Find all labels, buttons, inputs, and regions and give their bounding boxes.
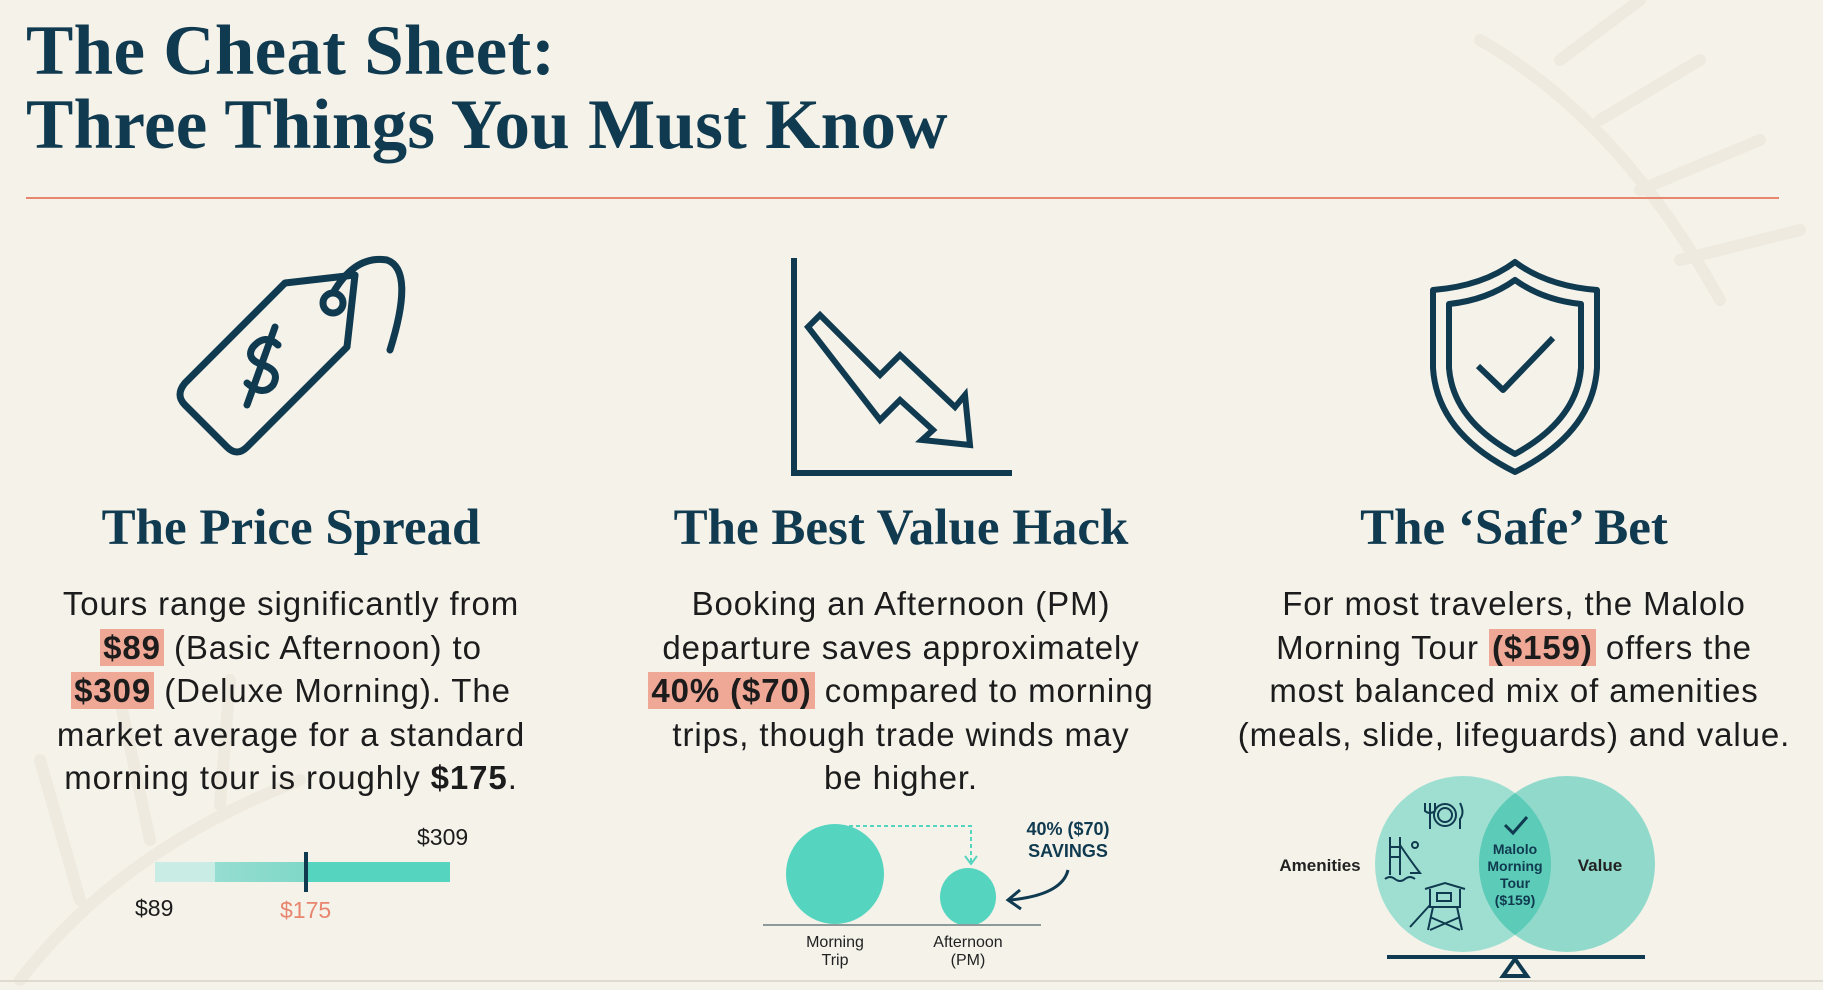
body text: 40% ($70) compared to morning: [651, 672, 1154, 709]
divider line: [26, 197, 1779, 199]
title: [26, 12, 948, 164]
icons: meal, slide, lifeguard tower: [1385, 803, 1465, 930]
body text: $309 (Deluxe Morning). The: [74, 672, 511, 709]
chart: venn diagram: Tour: [1500, 875, 1531, 891]
chart: venn diagram: [1279, 776, 1655, 978]
chart: price range bar: $89: [135, 895, 173, 921]
body text: trips, though trade winds may: [672, 716, 1130, 752]
panel: best value hack: [648, 258, 1154, 796]
chart: savings bubbles: [763, 819, 1110, 969]
arrow: [1010, 870, 1068, 900]
icon: declining chart: [791, 258, 1012, 476]
bottom rule: [0, 980, 1823, 982]
chart: venn diagram: Amenities: [1279, 856, 1361, 875]
body text: departure saves approximately: [662, 628, 1140, 666]
body text: market average for a standard: [57, 716, 525, 752]
chart: savings bubbles: Afternoon: [933, 934, 1003, 951]
heading: The ‘Safe’ Bet: [1360, 500, 1668, 556]
panel: price spread: [57, 256, 525, 796]
title: Three Things You Must Know: [26, 86, 948, 164]
heading: The Best Value Hack: [674, 500, 1128, 556]
chart: venn diagram: ($159): [1495, 892, 1535, 908]
icon: shield: [1430, 258, 1600, 475]
savings label: 40% ($70): [1026, 819, 1110, 839]
balance scale base: [1387, 955, 1645, 959]
body text: (meals, slide, lifeguards) and value.: [1238, 716, 1790, 752]
chart: price range bar: $175: [280, 897, 331, 923]
body text: [648, 585, 1154, 796]
title: The Cheat Sheet:: [26, 12, 555, 90]
chart: savings bubbles: Trip: [822, 952, 849, 969]
chart: price range bar: [135, 824, 468, 923]
icon: price tag: [176, 256, 406, 456]
body text: [57, 585, 525, 796]
body text: [1238, 585, 1790, 753]
body text: morning tour is roughly $175.: [64, 759, 518, 796]
chart: price range bar: $309: [417, 824, 468, 850]
chart: venn diagram: Value: [1578, 856, 1622, 875]
body text: For most travelers, the Malolo: [1282, 585, 1746, 622]
heading: The Price Spread: [102, 500, 480, 556]
chart: savings bubbles: Morning: [806, 934, 864, 951]
chart: savings bubbles: (PM): [951, 952, 985, 969]
panel: safe bet: [1238, 258, 1790, 753]
body text: Morning Tour ($159) offers the: [1276, 628, 1752, 666]
chart: savings bubbles: SAVINGS: [1028, 841, 1108, 861]
body text: Booking an Afternoon (PM): [692, 585, 1110, 622]
body text: most balanced mix of amenities: [1269, 672, 1759, 709]
chart: venn diagram: Morning: [1487, 858, 1543, 874]
body text: $89 (Basic Afternoon) to: [103, 628, 482, 666]
body text: Tours range significantly from: [63, 585, 519, 622]
body text: be higher.: [824, 759, 978, 796]
chart: venn diagram: Malolo: [1493, 841, 1537, 857]
